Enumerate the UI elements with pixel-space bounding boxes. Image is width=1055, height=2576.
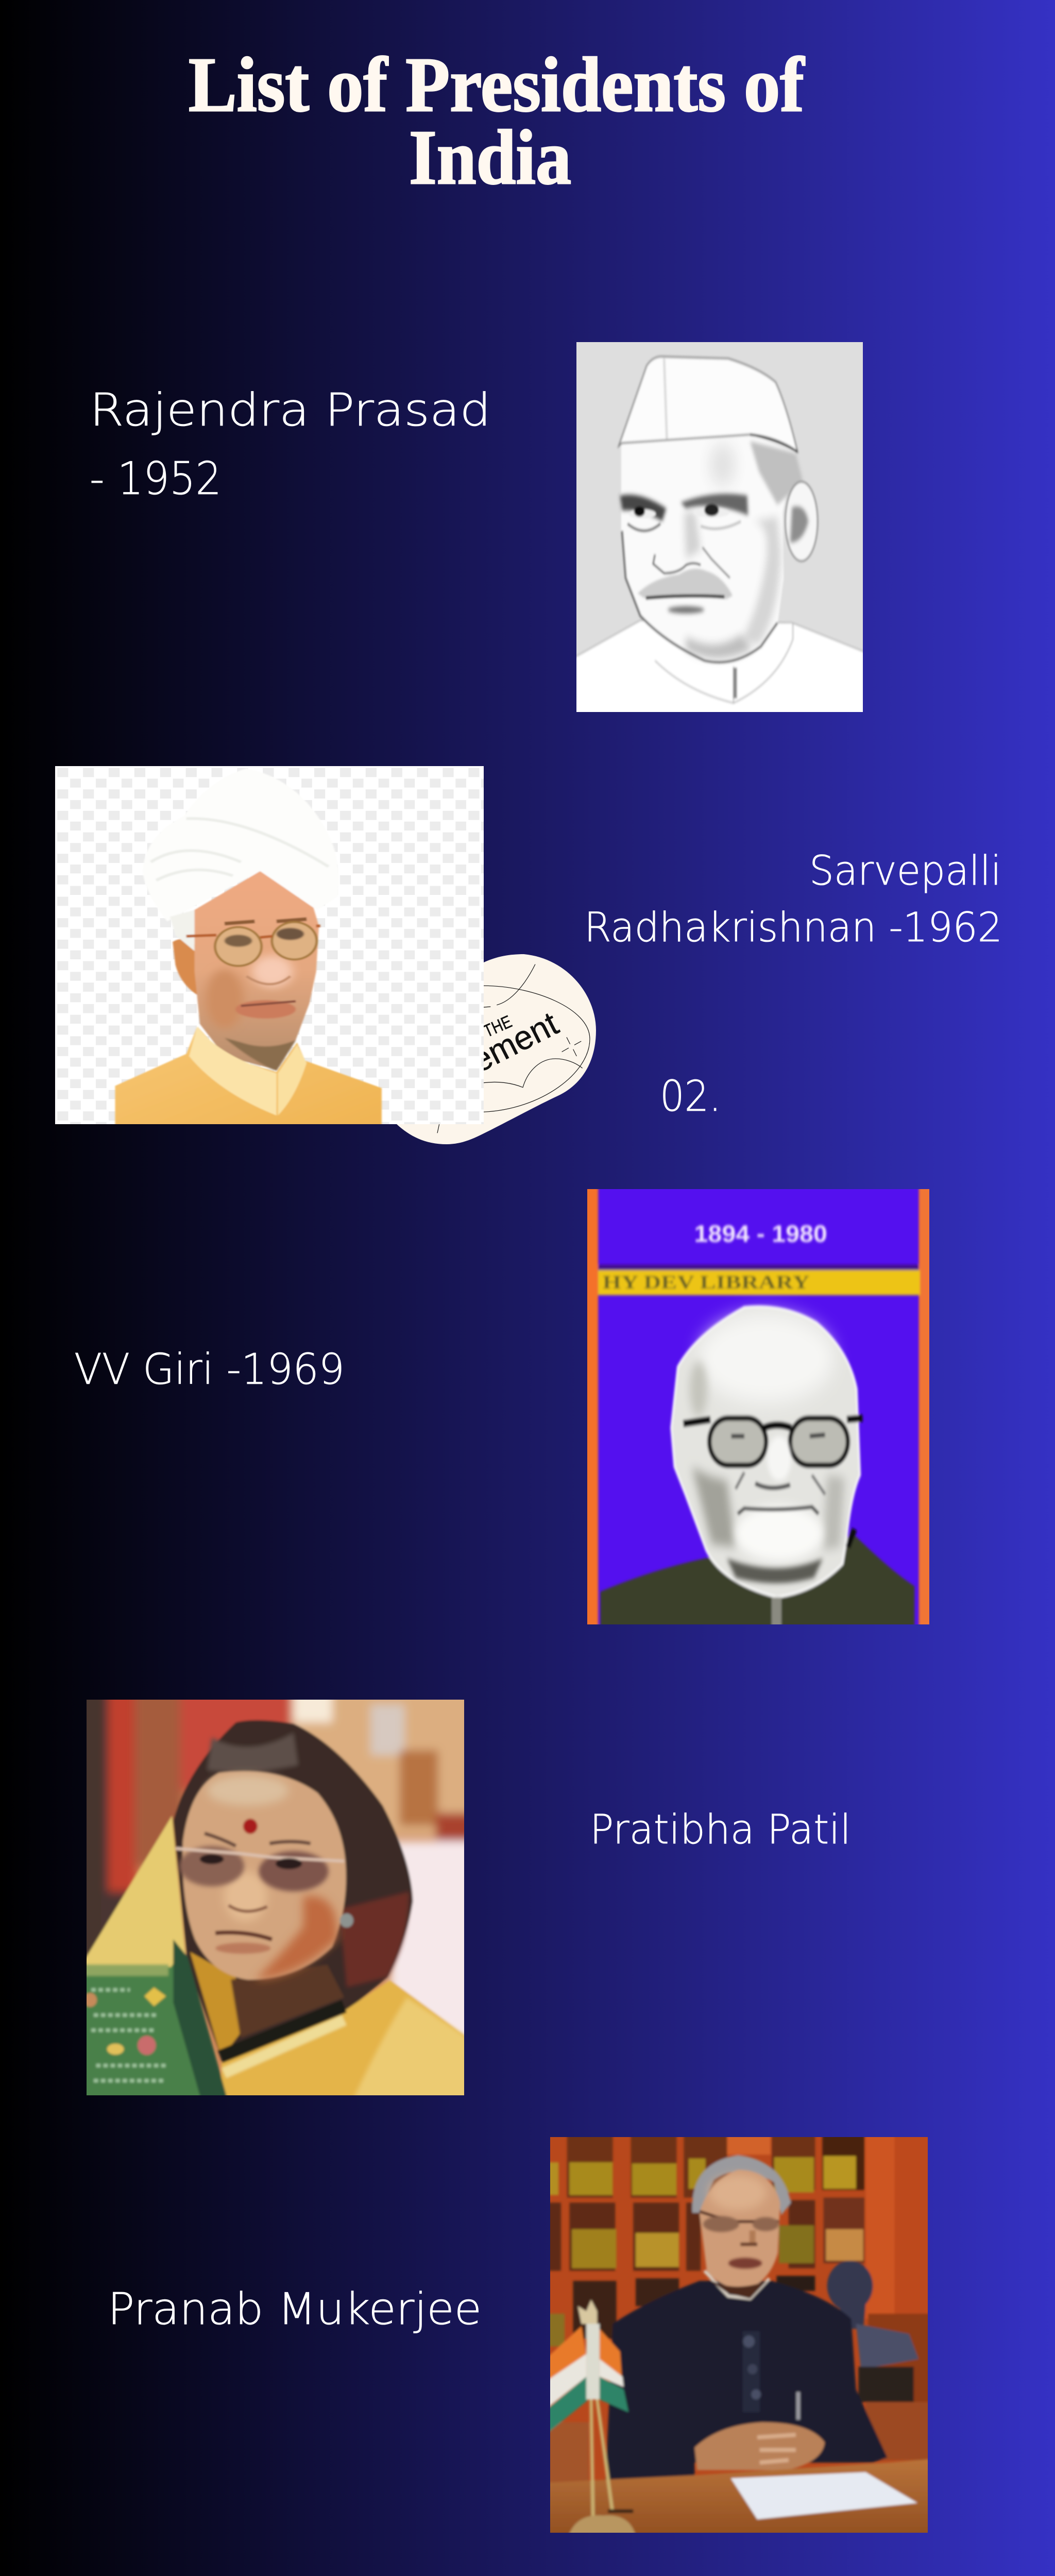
portrait: Pratibha Patil [87,1700,464,2095]
label: Rajendra Prasad: - 1952 [90,452,222,505]
jacket [606,2281,887,2480]
number label: 02.: 02. [660,1072,721,1121]
label: Rajendra Prasad: Rajendra Prasad [90,384,491,436]
label: Pratibha Patil: Pratibha Patil [590,1807,851,1853]
portrait: Rajendra Prasad [576,342,863,712]
bust [827,2261,918,2402]
portrait: Sarvepalli Radhakrishnan [55,766,484,1124]
label: Sarvepalli Radhakrishnan [584,848,1002,951]
label: Pranab Mukerjee: Pranab Mukerjee [108,2284,482,2335]
label: Sarvepalli Radhakrishnan: Sarvepalli [809,848,1001,894]
portrait: Pranab Mukerjee [550,2137,928,2533]
title: List of Presidents of [189,41,805,128]
sticker: statement badge [397,954,596,1144]
desk [543,2459,935,2540]
label: Rajendra Prasad [90,384,491,505]
label: Sarvepalli Radhakrishnan: Radhakrishnan -1962 [584,905,1002,951]
label: VV Giri: VV Giri -1969 [74,1345,345,1394]
head [692,2155,791,2298]
title: India [409,114,571,200]
hands [694,2422,825,2470]
sticker: statement badge: THE [481,1012,515,1041]
bookcase [543,2129,935,2347]
title [189,41,805,200]
portrait: VV Giri: HY DEV LIBRARY [603,1273,810,1293]
portrait: VV Giri: 1894 - 1980 [694,1220,827,1247]
desk flag [546,2300,637,2540]
sticker: statement badge: ement [465,1004,564,1079]
paper [731,2472,917,2519]
portrait: VV Giri [587,1189,929,1624]
